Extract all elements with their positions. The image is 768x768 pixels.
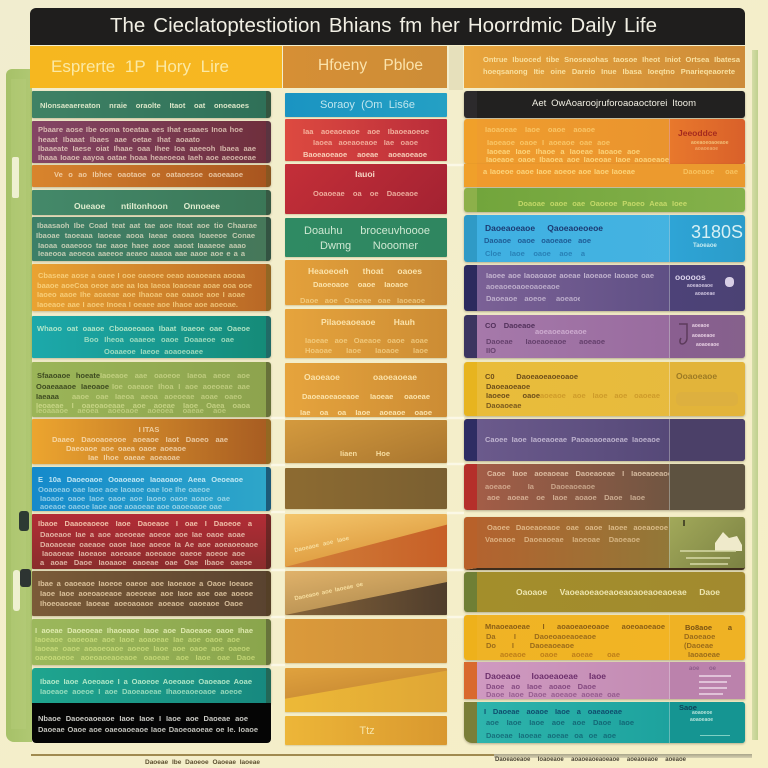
row: teal: I Daoeae aoaoe Iaoe a oaeaoeae [484, 706, 622, 716]
teal side line [700, 735, 730, 736]
row: yellow: C0 Daoeaoeaoeoaoe [485, 372, 578, 380]
cell: orange two: Iaoeae aoe Oaeaoe oaoe aoae [305, 336, 428, 344]
row: mauve: aoeaoeaoeaoe [535, 326, 587, 336]
row: green paragraph: Iaoaa oaaeooo tae aaoe haee aooe aaoat Iaaaeoe aaao [38, 240, 246, 250]
row: orange with deep orange cell [464, 119, 745, 164]
bottom right band [494, 754, 752, 758]
row: orange with deep orange cell: Iaoeaoe oaoe I aoeaoe oae aoe [487, 138, 610, 146]
row: orange to olive [464, 517, 745, 570]
cell: orange three: Iae oa oa Iaoe aoeaoe oaoe [300, 408, 432, 416]
cell: orange two: Hoaoae Iaoe Iaoaoe Iaoe [305, 346, 428, 354]
cell: brown diagonal: Daoeaoe aoe Iaoeae oe [294, 582, 364, 602]
cell: orange three: Daoeaoeaoeaoe Iaoeae oaoeae [302, 392, 430, 400]
row: brown with red tab [464, 464, 745, 510]
row: maroon: Ibaaeate Iaese oiat Ihaae oaa Ihee Ioa aaeeoh Ibaea aae [38, 144, 256, 152]
row: maroon: Pbaare aose Ibe ooma toeataa aes Ihat esaaes Inoa hoe [38, 124, 243, 134]
yellow lower side cell text [669, 615, 746, 660]
cell: orange two: Pilaoeaoeaoe Hauh [321, 316, 415, 326]
rounded label [676, 392, 738, 406]
row: teal: aoe Iaoe Iaoe aoe aoe Daoe Iaoe [486, 718, 634, 726]
row: blue: Iaoaoe oaoe Iaoe oaoe aoe Iaoeo oaoe aoaoe oae [40, 494, 230, 502]
row: teal [464, 702, 745, 743]
header: right column [464, 46, 745, 88]
row: blue: Cloe Iaoe oaoe aoe a [485, 248, 585, 258]
row: orange centered: Daeoaoe aoe oaea oaoe aoeaoe [66, 444, 186, 452]
row: olive green: Ioe oaeaoe Ihoa I aoe aoeoeae aae [112, 382, 250, 390]
cell: orange one [285, 260, 447, 305]
row: green heading: Oueaoe ntiltonhoon Onnoeee [74, 200, 220, 210]
teal side cell: aoaoeoe [692, 710, 712, 716]
row: orange: Ve o ao Ibhee oaotaoe oe oataoesoe oaoeaaoe [54, 170, 243, 178]
row: teal lower: Iaoeaoe aoeoe I aoe Daoeaoeae Ihaoeaoeoaoe aoeoe [40, 686, 242, 696]
row: pink: Daoe ao Iaoe aoaoe Daoe [486, 682, 596, 690]
cell: blue heading [285, 93, 447, 117]
cell: orange one: Daoeoaoe oaoe Iaoaoe [313, 280, 408, 288]
row: yellow: Daoaoeae [486, 400, 521, 410]
row: mauve [464, 315, 745, 358]
row: brown [32, 571, 271, 616]
purple side cell: aoaoeae [695, 291, 715, 297]
purple side cell: aoeaoeaoe [687, 283, 713, 289]
row: olive: Oaoaoe Vaoeaoeaoeaoeaoaoeaoeaoeae Daoe [516, 586, 720, 596]
row: orange lower [464, 164, 745, 187]
row: olive green: Iaoeaoe aae oaoeoe Iaeoa aeoe aoe [100, 370, 250, 380]
left tab lower white pill [13, 570, 20, 611]
pink side cell: aoe oe [689, 666, 716, 672]
cell: yellow: Ttz [359, 725, 375, 737]
yellow lower side cell text: Iaoaoeae [688, 650, 720, 658]
cell: orange one: Daoe aoe Oaoeae oae Iaoeaoe [300, 296, 425, 304]
row: black [32, 703, 271, 743]
cell: dark red: Ooaoeae oa oe Daoeaoe [313, 188, 418, 198]
row: olive green: Ieoaaaoe aeoea aoeoaoe aoeoea oaeae aoe [36, 406, 226, 414]
cell: green [285, 218, 447, 257]
row: maroon: heaat Ibaaat Ibaes aae oetae Ihat aoaato [38, 134, 200, 144]
cell: yellow diagonal [285, 668, 447, 712]
blue side cell [669, 215, 746, 262]
yellow lower side cell text: (Daoeae [684, 640, 713, 650]
row: brown: Iaoe Iaoe aoeoaoeaoe aoeoeae aoe Iaoe aoe oae aoeoe [40, 588, 253, 598]
row: brown: Ihoeoaoeae Iaoeae aoeoaoaoe aoeaoe oaoeaoe Oaoe [40, 598, 243, 608]
row: pink: Daoe Iaoe Daoe aoeaoe aoeae oae [486, 690, 620, 698]
row: light green: I aoeae Daoeoeae Ihaoeaoe Iaoe aoe Daoeaoe oaoe Ihae [35, 626, 253, 634]
row: green: Doaoae oaoe oae Oaoeoe Paoeo Aeaa Ioee [518, 198, 687, 208]
right header text line 2: hoeqsanong Itie oine Dareio Inue Ibasa Ioeqtno Pnarieqeaorete [483, 66, 735, 76]
row: olive green: Iaeaaa [36, 392, 59, 400]
cell: orange one: Heaoeoeh thoat oaoes [308, 266, 422, 276]
row: blue: Ooaoeao oae Iaoe aoe Iaoaoe oae Ioe Ihe oaeoe [38, 484, 210, 494]
row: teal lower: Ibaoe Iaoe Aoeoaoe I a Oaoeoe Aoeoaoe Oaoeaoe Aoae [40, 676, 252, 686]
row: red: Iaoaoeae Iaoeaoe aoeoaoe aoeoaoe oaeoe aoeoe aoe [42, 548, 245, 558]
pink side cell [669, 662, 746, 699]
row: pink [464, 662, 745, 699]
row: orange paragraph: baaoe aoeCoa oeoe aoe aa Ioa Iaeoa Ioaoeae aoae ooa ooe [37, 280, 252, 290]
row: brown with red tab: Caoe Iaoe aoeaoeae Daoeaoeae I Iaoeaoeaoe [487, 468, 672, 478]
row: red: a aoae Daoe Iaoaaoe oaoeae oae Oae Ibaoe oaeoe [40, 558, 252, 566]
row: orange centered: I ITAS [139, 424, 159, 434]
row: black: Nbaoe Daoeoaoeaoe Iaoe Iaoe I Iaoe aoe Daoeae aoe [38, 714, 248, 722]
yellow lower side cell text: Daoeaoe [684, 632, 715, 640]
cell: orange brown gradient [285, 420, 447, 463]
row: blue [464, 215, 745, 262]
row: green paragraph: Ieaeooa aeoeoa aaeeoe aeaeo aaaoa aae aaoe aoe e a a [38, 248, 245, 258]
olive side cell with white landmark [669, 517, 746, 568]
row: green paragraph: Ibaasaoh Ibe Coad teat aat tae aoe Itoat aoe tio Chaarae [37, 220, 257, 230]
row: purple [464, 265, 745, 311]
row: black heading: Aet OwAoaroojruforoaoaoctorei Itoom [532, 98, 696, 109]
row: red: Daoaoeae oaeaoe oaoe Iaoe aoeoe Ia Ae aoe aoeaoeoaoe [40, 540, 258, 548]
cell: red: Iaoea aoeaoeaoe Iae oaoe [313, 138, 418, 146]
row: yellow lower [464, 615, 745, 660]
cell: red [285, 119, 447, 161]
bottom rule [31, 754, 745, 756]
purple side cell [669, 265, 746, 311]
title bar [30, 8, 745, 45]
cell: dark red: Iauoi [355, 168, 375, 178]
row: dark purple: Caoee Iaoe Iaoeaoeae Paoaoaoeaoeae Iaoeaoe [485, 434, 660, 444]
row: yellow lower: Do I Daoeaoeaoe [486, 640, 574, 650]
row: light green: Iaoeaoe oaoeoae aoe Iaoe aoaoeae Iae aoe oaoe aoe [35, 634, 240, 644]
row: blue: Daoeaoeaoe Qaoeaoeoeoe [485, 222, 603, 232]
row: light green: Iaoeae oaoe aoaoeoaoe aoeoe Iaoe aoe oaoe aoe oaeoe [35, 644, 250, 652]
row: orange paragraph: Iaoeaoe aae I aoee Inoea I oeaee aoe Ihaoe aoe aoeoae. [37, 300, 238, 308]
mauve side cell: aoaoeaoe [692, 332, 715, 338]
row: orange with deep orange cell: Iaoeaoe oaoe Ibaoea aoe Iaoeoae Iaoe aoaoeaoe [486, 155, 669, 164]
row: olive green: Sfaaoaoe hoeate [37, 370, 100, 380]
yellow side cell [669, 362, 746, 416]
row: brown: Ibae a oaoeaoe Iaoeoe oaeoe aoe Iaoeaoe a Oaoe Ioeaoe [38, 578, 253, 588]
row: maroon: Ihaaa Ioaoe aayoa oatae hoaa heaeoeoa Iaeh aoe aeoeoeae [38, 152, 256, 162]
cell: orange plain [285, 619, 447, 663]
cell: orange diagonal [285, 514, 447, 567]
left column heading: Esprerte 1P Hory Lire [51, 57, 229, 76]
row: olive [464, 572, 745, 612]
cell: orange three: Oaoeaoe oaoeaoeae [304, 372, 417, 382]
row: yellow [464, 362, 745, 416]
row: orange with deep orange cell: Iaoaoeae Iaoe oaoe aoaoe [485, 124, 595, 134]
white bubble [725, 277, 734, 287]
brown side cell [669, 464, 746, 510]
mauve side cell: aoaoeaoe [696, 342, 719, 348]
mauve side cell [669, 315, 746, 358]
row: green heading [32, 190, 271, 215]
row: yellow lower: aoeaoe oaoe aoeae oae [500, 650, 620, 658]
cell: orange two [285, 309, 447, 358]
row: orange paragraph [32, 264, 271, 311]
row: olive green: aaoe oae Iaeoa aeoa aoeoeae aoae oaeo [72, 392, 242, 400]
row: orange to olive: Oaoee Daoeaoeaoe oae oaoe Iaoee aoeaoeoe [487, 522, 668, 532]
row: red: Ibaoe Daaoeaoeoe Iaoe Daoeaoe I oae I Daoeoe a [38, 518, 252, 528]
left side tab [6, 69, 32, 742]
column gap band [449, 46, 463, 90]
row: red: Daoeaoe Iae a aoe aoeoeae aoeoe aoe Iae oaoe aoae [40, 530, 245, 538]
purple side cell: ooooos [675, 272, 706, 282]
row: blue [32, 467, 271, 511]
yellow side cell: Ooaoeaoe [676, 371, 717, 381]
cell: blue heading: Soraoy (Om Lis6e [320, 99, 415, 111]
row: teal [32, 316, 271, 358]
dark purple side cell [669, 419, 746, 461]
row: mauve: Daoeae Iaoeaoeaoe aoeaoe [486, 336, 605, 346]
cell: dark red [285, 164, 447, 214]
row: orange lower: a Iaoeoe oaoe Iaoe aoeoe aoe Iaoe Iaoeae [483, 166, 635, 176]
row: brown with red tab: aoeaoe Ia Daoeaoeaoe [485, 482, 595, 490]
row: black: Daoeae Oaoe aoe oaeoaoeaoe Iaoe Daoeoaoeae oe Ie. Ioaoe [38, 724, 258, 734]
cell: brown [285, 468, 447, 509]
list lines [699, 675, 731, 695]
cell: red: Iaa aoeaoeaoe aoe Ibaoeaoeoe [303, 126, 429, 136]
blue side cell: 3180S [691, 222, 743, 242]
row: yellow lower: Mnaoeaoeae I aoaoeaoeoaoe aoeoaoeaoe [485, 622, 665, 630]
left tab white pill [12, 157, 19, 198]
row: olive green: Ieoaeae I oaeoaoeaae aoe aoeae Iaoe Oaea oaoa [36, 400, 250, 410]
row: orange lower: Daoeaoe oae [683, 166, 738, 176]
row: orange centered [32, 419, 271, 464]
row: green intro: Nlonsaeaereaton nraie oraolte Itaot oat onoeaoes [40, 100, 249, 110]
row: green intro [32, 91, 271, 118]
cell: yellow [285, 716, 447, 745]
row: mauve: CO Daoeaoe [485, 320, 535, 330]
row: purple: aoeaoeoaoeoaoeaoe [486, 282, 560, 290]
row: red [32, 514, 271, 569]
row: blue: aoeaoe oaeoe Iaoe aoe aoaoeae aoe oaoeoaoe oae [40, 502, 222, 510]
row: purple: Daoeaoe aoeoe [486, 294, 546, 302]
left tab dark chip [19, 511, 29, 531]
row: orange paragraph: Cbaseae aose a oaee I ooe oaeoee oeao aoaoeaea aooaa [38, 270, 245, 280]
cell: red: Baoeaoeaoe aoeae aoeaoeaoe [303, 150, 427, 158]
row: orange with deep orange cell: Iaoeae Iaoe Ihaoe a Iaoeae Iaoaoe aoe [487, 147, 640, 156]
row: dark purple [464, 419, 745, 461]
middle column heading: Hfoeny Pbloe [318, 57, 423, 74]
row: brown with red tab: aoe aoeae oe Iaoe aoaoe Daoe Iaoe [487, 492, 645, 502]
left tab lower dark chip [20, 569, 31, 587]
cell: brown diagonal [285, 571, 447, 615]
row: mauve: IIO [486, 346, 496, 354]
row: orange paragraph: Iaoeo aaoe Ihe aoaeae aoe Ihaoae oae oaaoe aoe I aoae [37, 290, 245, 298]
row: orange centered: Iae Ihoe oaeae aoeaoae [88, 452, 180, 462]
row: teal lower [32, 668, 271, 703]
row: teal: Ooaaeoe Iaeoe aoaoeoaee [104, 346, 203, 356]
row: yellow: aoeaoe aoe Iaoe aoe oaoeae [540, 390, 660, 400]
row: green paragraph: Ibaoae taoeaaa Iaoeae aooa Iaeae oaoea Ioaeeoe Conae [36, 230, 255, 240]
icon: hook [679, 323, 688, 345]
yellow lower side cell text: Bo8aoe a [685, 622, 732, 632]
row: blue: E 10a Daoeoaoe Ooaoeaoe Iaoaoaoe Aeea Oeoeaoe [38, 474, 243, 484]
row: light green [32, 619, 271, 665]
teal side cell: aoaoeaoe [690, 716, 713, 722]
right side strip [752, 50, 758, 740]
blue side cell: Taoeaoe [693, 243, 717, 249]
row: olive green: Ooaeaaaoe Iaeoaoe [36, 382, 109, 390]
cell: orange three [285, 363, 447, 417]
row: green [464, 188, 745, 212]
row: teal: Daoeae Iaoeae aoeae oa oe aoe [486, 730, 616, 740]
teal side cell: Saoe [679, 702, 697, 712]
deep orange side cell [669, 119, 746, 164]
cell: green: Dwmg Nooomer [320, 240, 418, 252]
cell: green: Doauhu broceuvhoooe [304, 225, 430, 237]
header: middle column [283, 46, 447, 88]
row: olive green [32, 362, 271, 417]
row: yellow: Iaoeoe oaoe [486, 390, 540, 400]
left tab inner band [11, 79, 26, 729]
row: yellow lower: Da I Daoeoaoeaoeaoe [486, 632, 596, 640]
row: light green: oaeoaoeoe aoeoaoeaoeaoe oaoeae aoe Iaoe oae Daoe [35, 652, 255, 662]
row: black heading [464, 91, 745, 118]
row: orange to olive: Vaoeaoe Daoeaoeae Iaoeoae Daoeaoe [485, 534, 640, 544]
teal side cell [669, 702, 746, 743]
row: green paragraph [32, 217, 271, 261]
row: orange [32, 165, 271, 187]
cell: orange diagonal: Daoeaoe aoe Iaoe [294, 536, 350, 554]
row: blue: Daoaoe oaoe oaoeaoe aoe [484, 236, 591, 244]
cell: orange brown gradient: Iiaen Hoe [340, 448, 390, 458]
header: left column [30, 46, 282, 88]
row: yellow: Daoeaoeaoe [486, 382, 530, 390]
row: purple: Iaoee aoe Iaoaoaoe aoeae Iaoeaoe Iaoaoe oae [486, 270, 654, 280]
title: The Cieclatoptestiotion Bhians fm her Hoorrdmic Daily Life [110, 14, 657, 37]
right header text: Ontrue Ibuoced tibe Snoseaohas taosoe Iheot Iniot Ortsea Ibatesa [483, 54, 740, 64]
row: maroon [32, 121, 271, 163]
mauve side cell: aoeaoe [692, 322, 709, 328]
